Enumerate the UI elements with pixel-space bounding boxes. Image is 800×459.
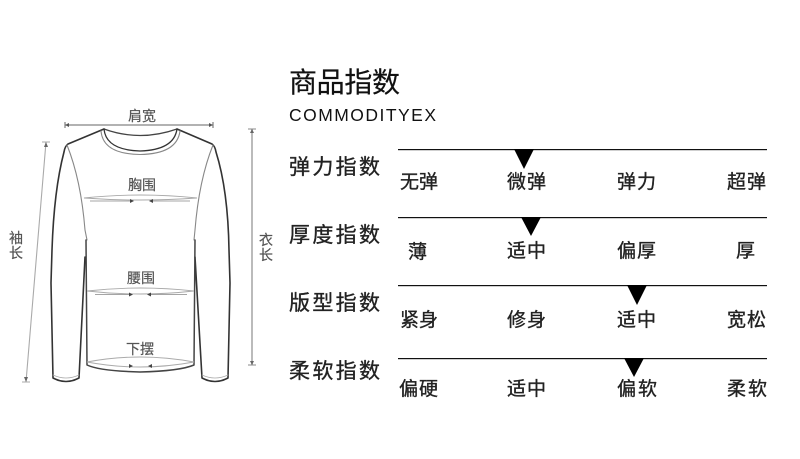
scale labels: 偏厚 bbox=[617, 240, 656, 262]
scale labels: 薄 bbox=[408, 241, 427, 263]
title: 商品指数 bbox=[289, 67, 400, 98]
scale labels: 紧身 bbox=[400, 309, 438, 331]
heading: thickness: 厚度指数 bbox=[289, 224, 380, 247]
panel: elasticity index bbox=[289, 149, 767, 193]
marker bbox=[624, 358, 644, 377]
chest measurement bbox=[84, 177, 197, 203]
body length measurement: 衣 bbox=[259, 232, 273, 248]
scale labels: 宽松 bbox=[727, 309, 766, 331]
shoulder width measurement: 肩宽 bbox=[128, 108, 156, 124]
scale labels: 柔软 bbox=[727, 378, 767, 400]
body length measurement bbox=[248, 129, 273, 365]
scale labels: 偏硬 bbox=[399, 378, 438, 400]
panel: thickness index bbox=[289, 217, 767, 263]
scale labels: 超弹 bbox=[727, 171, 766, 193]
marker bbox=[521, 217, 541, 236]
scale line bbox=[398, 285, 767, 286]
body length measurement: 长 bbox=[259, 247, 273, 263]
scale labels: 适中 bbox=[507, 240, 546, 262]
scale labels: 适中 bbox=[617, 309, 656, 331]
heading: elasticity: 弹力指数 bbox=[289, 156, 380, 179]
scale line bbox=[398, 358, 767, 359]
shoulder width measurement bbox=[65, 108, 213, 128]
chest measurement: 胸围 bbox=[128, 177, 156, 193]
heading: softness: 柔软指数 bbox=[289, 360, 380, 383]
scale line bbox=[398, 149, 767, 150]
scale labels: 厚 bbox=[736, 241, 755, 262]
panel: softness index bbox=[289, 358, 767, 400]
scale labels: 偏软 bbox=[617, 378, 657, 400]
hem measurement bbox=[87, 341, 194, 368]
scale labels: 修身 bbox=[507, 309, 546, 331]
scale line bbox=[398, 217, 767, 218]
scale labels bbox=[400, 171, 766, 193]
scale labels: 适中 bbox=[507, 378, 546, 400]
heading: fit: 版型指数 bbox=[289, 292, 380, 315]
scale labels: 微弹 bbox=[507, 171, 546, 193]
scale labels bbox=[400, 309, 766, 331]
panel: garment measurement diagram bbox=[9, 108, 273, 382]
scale labels: 弹力 bbox=[617, 171, 656, 193]
sleeve length measurement bbox=[9, 142, 50, 382]
hem measurement: 下摆 bbox=[126, 341, 154, 357]
marker bbox=[627, 285, 647, 305]
waist measurement bbox=[87, 270, 194, 296]
subtitle: COMMODITYEX bbox=[289, 105, 436, 125]
scale labels bbox=[408, 240, 755, 263]
marker bbox=[514, 149, 534, 169]
icon: long sleeve shirt outline bbox=[51, 129, 230, 382]
sleeve length measurement: 袖 bbox=[9, 230, 23, 246]
panel: fit index bbox=[289, 285, 767, 331]
scale labels bbox=[399, 378, 767, 400]
scale labels: 无弹 bbox=[400, 171, 438, 193]
sleeve length measurement: 长 bbox=[9, 245, 23, 261]
waist measurement: 腰围 bbox=[127, 270, 155, 286]
